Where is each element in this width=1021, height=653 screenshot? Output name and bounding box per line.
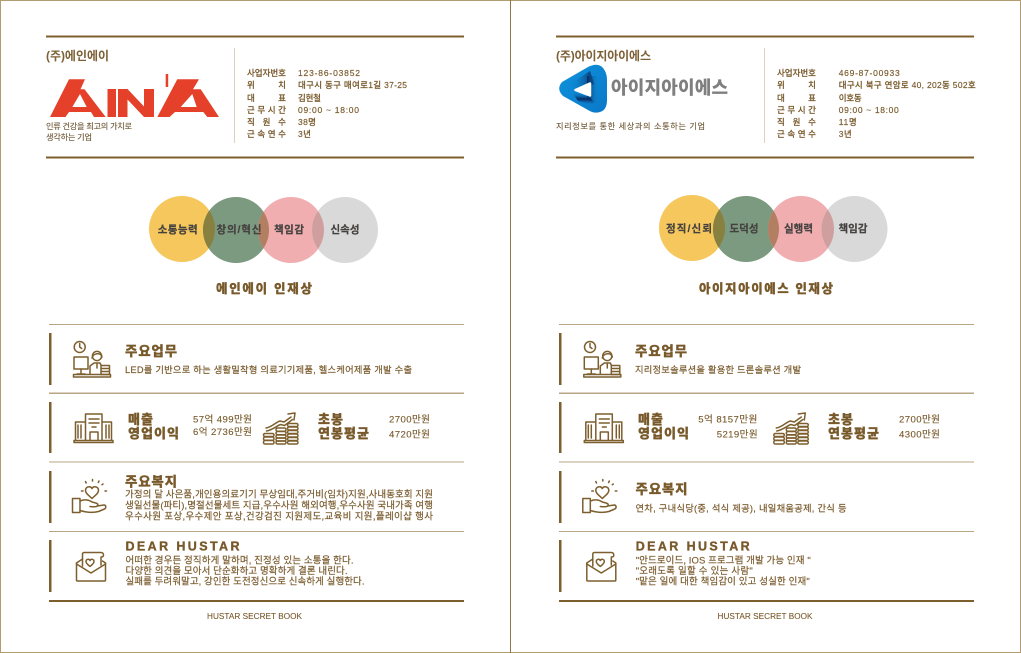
row: finance and salary — [559, 402, 940, 453]
row: welfare — [559, 471, 847, 523]
row: finance and salary: 4720만원 — [389, 430, 430, 440]
row: dear hustar: "오래도록 일할 수 있는 사람" — [636, 565, 753, 577]
row: finance and salary: 2700만원 — [899, 414, 940, 426]
row: finance and salary — [49, 402, 430, 453]
company facts: 위치 — [777, 80, 816, 90]
tagline: 생각하는 기업 — [46, 132, 92, 142]
row: finance and salary: 초봉 — [828, 412, 853, 427]
company facts: 이호동 — [839, 93, 862, 103]
company facts: 대구시 북구 연암로 40, 202동 502호 — [839, 80, 976, 90]
company facts: 3년 — [839, 129, 852, 139]
tagline — [46, 121, 132, 142]
row: dear hustar: DEAR HUSTAR — [636, 540, 750, 554]
company facts: 3년 — [298, 129, 311, 139]
talent venn circles AINA — [149, 196, 378, 263]
talent venn circles AINA: 신속성 — [330, 223, 360, 236]
panel: right page AIGIS — [556, 36, 976, 621]
company facts: 38명 — [298, 117, 316, 127]
row: finance and salary: 6억 2736만원 — [193, 426, 252, 438]
talent venn circles AIGIS: 실행력 — [784, 222, 813, 235]
row: dear hustar: 어떠한 경우든 정직하게 말하며, 진정성 있는 소통을 한다. — [126, 554, 354, 566]
company facts: 469-87-00933 — [839, 68, 900, 78]
company facts: 09:00 ~ 18:00 — [298, 105, 359, 115]
row: finance and salary: 57억 499만원 — [193, 414, 252, 426]
row: finance and salary: 영업이익 — [638, 426, 689, 441]
company facts: 근무시간 — [777, 105, 816, 115]
row: welfare: 가정의 달 사은품,개인용의료기기 무상임대,주거비(임차)지원,사내동호회 지원 — [125, 488, 433, 500]
company facts: 근속연수 — [777, 129, 816, 139]
panel: company header AIGIS — [556, 36, 976, 158]
company facts: 09:00 ~ 18:00 — [839, 105, 899, 115]
row: dear hustar: DEAR HUSTAR — [126, 540, 240, 554]
talent venn circles AINA: 창의/혁신 — [216, 223, 262, 236]
company facts: 123-86-03852 — [298, 68, 360, 78]
row: main business — [559, 333, 801, 385]
row: finance and salary: 2700만원 — [389, 414, 430, 426]
talent heading AINA: 에인에이 인재상 — [216, 281, 312, 296]
row: finance and salary: 5억 8157만원 — [698, 414, 757, 426]
row: dear hustar — [559, 540, 811, 592]
company facts: 대표 — [777, 93, 816, 103]
row: finance and salary: 연봉평균 — [828, 426, 879, 441]
company facts: 김현철 — [298, 93, 321, 103]
row: main business: 지리정보솔루션을 활용한 드론솔루션 개발 — [635, 364, 801, 375]
tagline: 지리정보를 통한 세상과의 소통하는 기업 — [556, 121, 705, 131]
row: main business: 주요업무 — [125, 344, 177, 359]
row: finance and salary: 연봉평균 — [318, 426, 369, 441]
company facts: 대구시 동구 매여로1길 37-25 — [298, 80, 407, 90]
talent venn circles AINA: 소통능력 — [158, 223, 198, 236]
company facts — [777, 68, 976, 139]
row: welfare — [49, 471, 433, 523]
panel: company header AINA — [46, 36, 464, 158]
talent venn circles AIGIS: 책임감 — [838, 223, 868, 235]
logo: triangle mark and wordmark: 아이지아이에스 — [611, 78, 728, 98]
company facts: 11명 — [839, 117, 857, 127]
talent venn circles AIGIS: 도덕성 — [730, 222, 758, 235]
row: main business — [49, 333, 412, 385]
row: welfare: 연차, 구내식당(중, 석식 제공), 내일채움공제, 간식 등 — [636, 502, 847, 514]
row: welfare: 생일선물(파티),명절선물세트 지급,우수사원 해외여행,우수사원 국내가족 여행 — [125, 500, 433, 512]
talent venn circles AIGIS — [659, 195, 888, 262]
row: main business: LED를 기반으로 하는 생활밀착형 의료기기제품, 헬스케어제품 개발 수출 — [125, 364, 412, 375]
row: dear hustar: 실패를 두려워말고, 강인한 도전정신으로 신속하게 실행한다. — [126, 576, 364, 588]
talent heading AIGIS: 아이지아이에스 인재상 — [699, 281, 833, 296]
talent venn circles AIGIS: 정직/신뢰 — [666, 222, 712, 235]
row: dear hustar — [49, 540, 364, 592]
logo: triangle mark and wordmark — [559, 65, 728, 113]
row: finance and salary: 4300만원 — [899, 430, 940, 440]
company name: (주)아이지아이에스 — [556, 49, 651, 63]
row: dear hustar: "안드로이드, IOS 프로그램 개발 가능 인재 " — [636, 554, 811, 566]
row: finance and salary: 5219만원 — [717, 430, 758, 440]
talent venn circles AINA: 책임감 — [274, 224, 304, 236]
row: welfare: 주요복지 — [125, 474, 177, 490]
company facts: 직원수 — [777, 117, 816, 127]
row: finance and salary: 매출 — [128, 412, 153, 427]
row: finance and salary: 영업이익 — [128, 426, 179, 441]
logo: AIN'A — [50, 74, 219, 117]
row: finance and salary: 매출 — [638, 412, 663, 427]
row: main business: 주요업무 — [635, 344, 687, 359]
row: welfare: 우수사원 포상,우수제안 포상,건강검진 지원제도,교육비 지원,플레이샵 행사 — [125, 510, 433, 522]
company facts: 대표 — [247, 93, 286, 103]
company facts: 사업자번호 — [247, 68, 286, 78]
row: dear hustar: "맡은 일에 대한 책임감이 있고 성실한 인재" — [636, 576, 810, 588]
company facts: 사업자번호 — [777, 68, 816, 78]
panel: left page AINA — [46, 36, 464, 621]
tagline: 인류 건강을 최고의 가치로 — [46, 121, 132, 131]
row: welfare: 주요복지 — [636, 482, 688, 497]
row: dear hustar: 다양한 의견을 모아서 단순화하고 명확하게 결론 내린다. — [126, 565, 348, 577]
company facts — [247, 68, 407, 139]
row: finance and salary: 초봉 — [318, 412, 343, 427]
footer: HUSTAR SECRET BOOK — [207, 612, 303, 621]
company facts: 근속연수 — [247, 129, 286, 139]
company name: (주)에인에이 — [46, 49, 109, 63]
company facts: 위치 — [247, 80, 286, 90]
company facts: 근무시간 — [247, 105, 286, 115]
footer: HUSTAR SECRET BOOK — [718, 612, 813, 621]
company facts: 직원수 — [247, 117, 286, 127]
